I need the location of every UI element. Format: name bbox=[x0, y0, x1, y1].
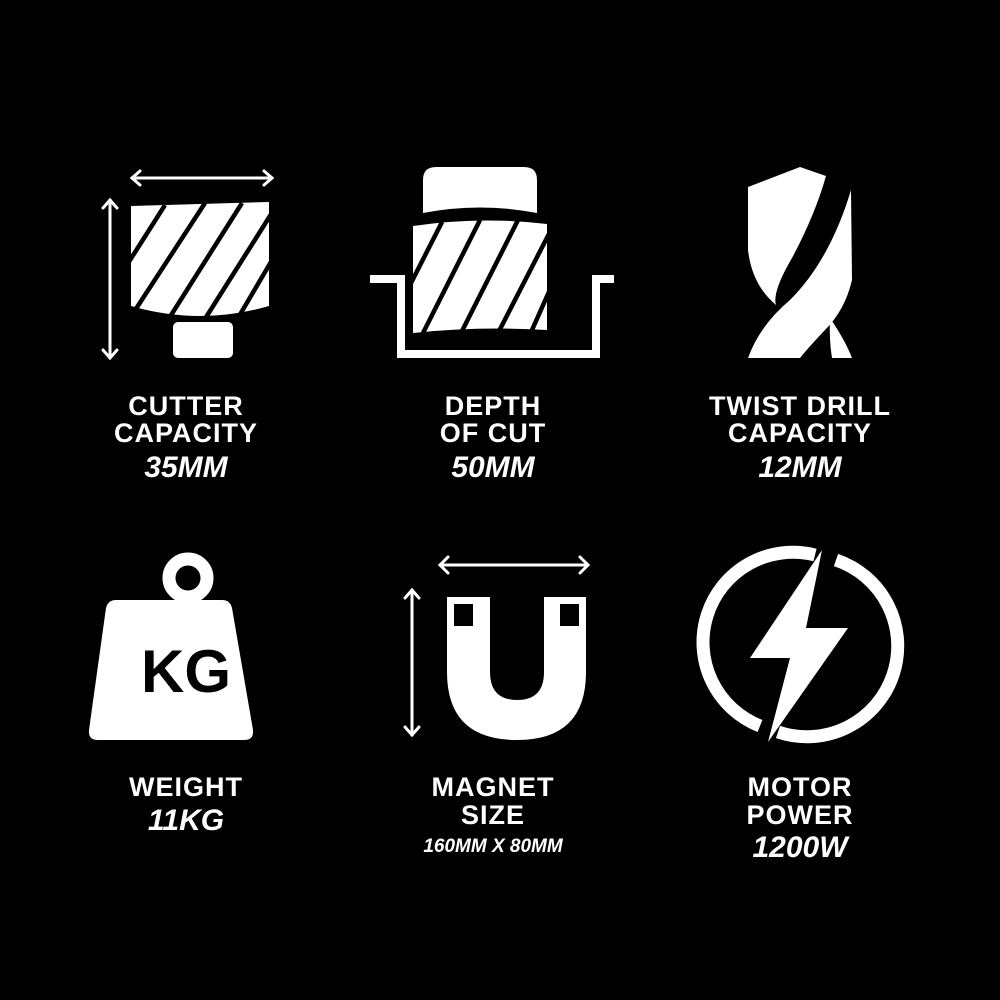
icon: magnet bbox=[405, 557, 588, 740]
label: motor power: POWER bbox=[746, 800, 854, 830]
label: magnet size: MAGNET bbox=[432, 772, 554, 802]
label: magnet size: 160MM X 80MM bbox=[423, 836, 564, 857]
icon: twist drill bbox=[748, 167, 852, 358]
icon: weight: KG bbox=[141, 638, 231, 705]
label: twist drill capacity: TWIST DRILL bbox=[709, 391, 891, 421]
label: depth of cut: DEPTH bbox=[445, 391, 541, 421]
label: twist drill capacity bbox=[709, 391, 891, 484]
label: motor power: MOTOR bbox=[748, 772, 852, 802]
label: weight: 11KG bbox=[148, 804, 224, 837]
label: magnet size: SIZE bbox=[461, 800, 525, 830]
label: motor power bbox=[746, 772, 854, 864]
label: weight bbox=[129, 772, 243, 837]
label: twist drill capacity: CAPACITY bbox=[728, 418, 872, 448]
label: cutter capacity: CAPACITY bbox=[114, 418, 258, 448]
label: cutter capacity: CUTTER bbox=[128, 391, 244, 421]
icon: cutter capacity bbox=[103, 171, 275, 358]
label: depth of cut: 50MM bbox=[451, 451, 536, 484]
label: depth of cut: OF CUT bbox=[440, 418, 546, 448]
icon: depth of cut bbox=[370, 167, 614, 354]
label: twist drill capacity: 12MM bbox=[758, 451, 843, 484]
label: weight: WEIGHT bbox=[129, 772, 243, 802]
label: cutter capacity bbox=[114, 391, 258, 484]
label: motor power: 1200W bbox=[752, 831, 850, 864]
icon: motor power bbox=[703, 550, 898, 742]
icon: weight bbox=[89, 559, 253, 740]
label: depth of cut bbox=[440, 391, 546, 484]
label: cutter capacity: 35MM bbox=[144, 451, 229, 484]
label: magnet size bbox=[423, 772, 564, 857]
